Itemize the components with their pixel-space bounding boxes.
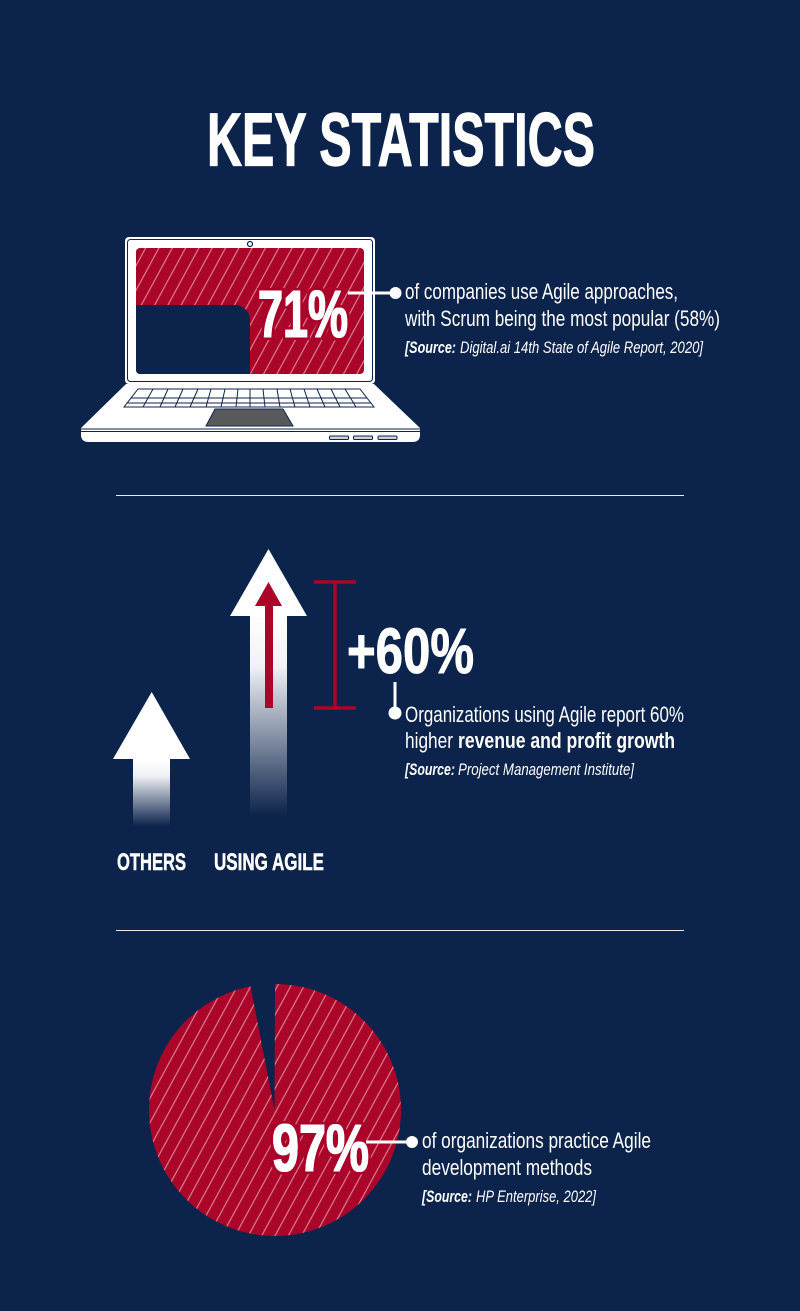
text block: Agile practice: development methods xyxy=(422,1155,592,1180)
text block: revenue growth: higher xyxy=(405,728,453,753)
label: others: OTHERS xyxy=(117,849,186,876)
panel: revenue growth statistic xyxy=(113,549,684,876)
stat: 97%: 97% xyxy=(272,1111,369,1186)
text block: Agile adoption: of companies use Agile approaches, xyxy=(405,279,678,304)
stat: 71%: 71% xyxy=(258,277,348,352)
icon: others arrow xyxy=(113,692,190,826)
text block: Agile adoption xyxy=(404,279,720,357)
connector line with dot xyxy=(348,287,402,299)
icon: using agile arrow xyxy=(230,549,307,816)
stat: +60%: +60% xyxy=(347,615,474,687)
text block: Agile adoption: with Scrum being the most popular (58%) xyxy=(404,306,720,331)
text block: revenue growth xyxy=(404,702,684,779)
text block: revenue growth: revenue and profit growth xyxy=(458,728,675,753)
icon: laptop xyxy=(81,237,420,442)
text block: Agile practice: [Source: xyxy=(421,1188,472,1206)
bracket: 60 percent difference xyxy=(314,582,356,708)
text block: Agile practice: of organizations practice Agile xyxy=(422,1128,651,1153)
title: KEY STATISTICS xyxy=(207,98,595,182)
text block: Agile practice: HP Enterprise, 2022] xyxy=(476,1188,596,1206)
connector line with dot xyxy=(388,682,402,720)
panel: laptop statistic xyxy=(81,237,720,442)
text block: Agile adoption: Digital.ai 14th State of Agile Report, 2020] xyxy=(460,339,703,357)
connector line with dot xyxy=(366,1136,418,1148)
text block: Agile adoption: [Source: xyxy=(404,339,456,357)
chart: pie 97 percent xyxy=(149,984,401,1236)
text block: revenue growth: Project Management Institute] xyxy=(458,761,634,779)
text block: revenue growth: [Source: xyxy=(404,761,455,779)
text block: Agile practice xyxy=(421,1128,651,1206)
text block: revenue growth: Organizations using Agile report 60% xyxy=(405,702,684,727)
panel: agile practice statistic xyxy=(149,984,651,1236)
label: using agile: USING AGILE xyxy=(214,849,324,876)
